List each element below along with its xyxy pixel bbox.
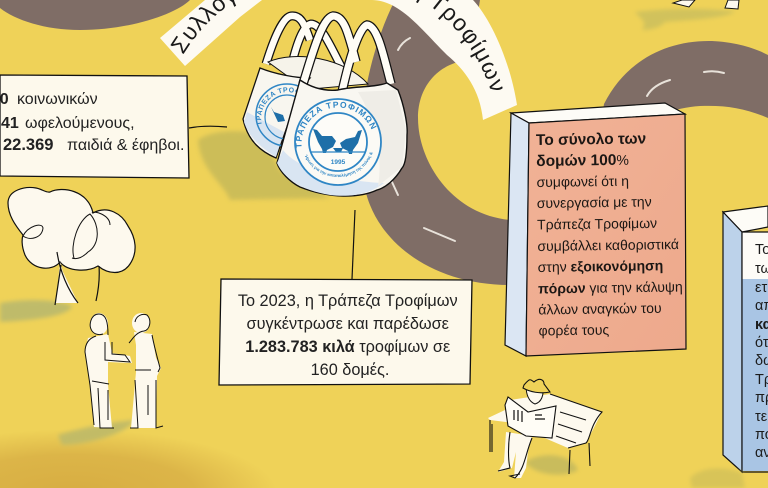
callout box: 100% agreement: Τράπεζα Τροφίμων (537, 215, 657, 232)
front bag logo (294, 98, 382, 186)
callout box: 100% agreement (505, 103, 687, 356)
front bag logo: Ήρωες για την καταπολέμηση της πείνας & της σπατάλης (304, 152, 373, 178)
ground shading bottom left (0, 385, 330, 488)
callout: beneficiaries: ωφελούμενους, (25, 115, 135, 132)
icon: walking figure feet, top right (635, 0, 739, 30)
shadow under people (58, 420, 135, 445)
shadow under box (690, 468, 745, 488)
callout: beneficiaries: κοινωνικών (17, 91, 98, 108)
front bag (276, 11, 408, 197)
road (0, 0, 768, 285)
callout box: 100% agreement: φορέα τους (538, 321, 610, 338)
callout box: 100% agreement: συμβάλλει καθοριστικά (537, 236, 679, 254)
callout: kilos of food: συγκέντρωσε και παρέδωσε (247, 315, 449, 333)
callout: beneficiaries: 41 (1, 115, 19, 132)
shadow under tree (0, 300, 72, 322)
callout box: 100% agreement: στην εξοικονόμηση (538, 257, 663, 275)
road markings (392, 38, 724, 241)
back bag logo (255, 83, 298, 146)
back bag (242, 11, 369, 159)
callout box: 100% agreement: συμφωνεί ότι η (536, 173, 629, 190)
callout box: 100% agreement: πόρων για την κάλυψη (538, 278, 683, 296)
callout: beneficiaries: 22.369 (3, 136, 53, 154)
callout box: 100% agreement: Το σύνολο των (536, 130, 646, 149)
icon: man reading newspaper on bench (488, 379, 602, 478)
callout: kilos of food (219, 210, 472, 385)
shadow under bags (198, 131, 330, 200)
callout: beneficiaries: παιδιά & έφηβοι. (67, 137, 184, 154)
front bag logo: 1995 (331, 159, 346, 166)
callout box: 100% agreement: άλλων αναγκών του (538, 300, 662, 317)
icon: food bank bags (242, 11, 408, 197)
icon: trees (8, 188, 135, 305)
icon: two people talking (85, 313, 163, 428)
callout box: right side, cropped: τε (755, 409, 768, 425)
callout box: 100% agreement: δομών 100% (536, 152, 629, 170)
front bag logo: ΤΡΑΠΕΖΑ ΤΡΟΦΙΜΩΝ (296, 102, 377, 148)
shadow under bench (525, 455, 578, 475)
callout: kilos of food: 160 δομές. (311, 361, 389, 379)
callout box: right side, cropped: ετ (755, 280, 767, 296)
callout box: 100% agreement: συνεργασία με την (537, 193, 652, 211)
callout: beneficiaries (0, 75, 227, 178)
callout: kilos of food: Το 2023, η Τράπεζα Τροφίμων (238, 292, 458, 310)
callout: kilos of food: 1.283.783 κιλά τροφίμων σε (245, 338, 450, 356)
callout box: right side, cropped (723, 206, 768, 472)
